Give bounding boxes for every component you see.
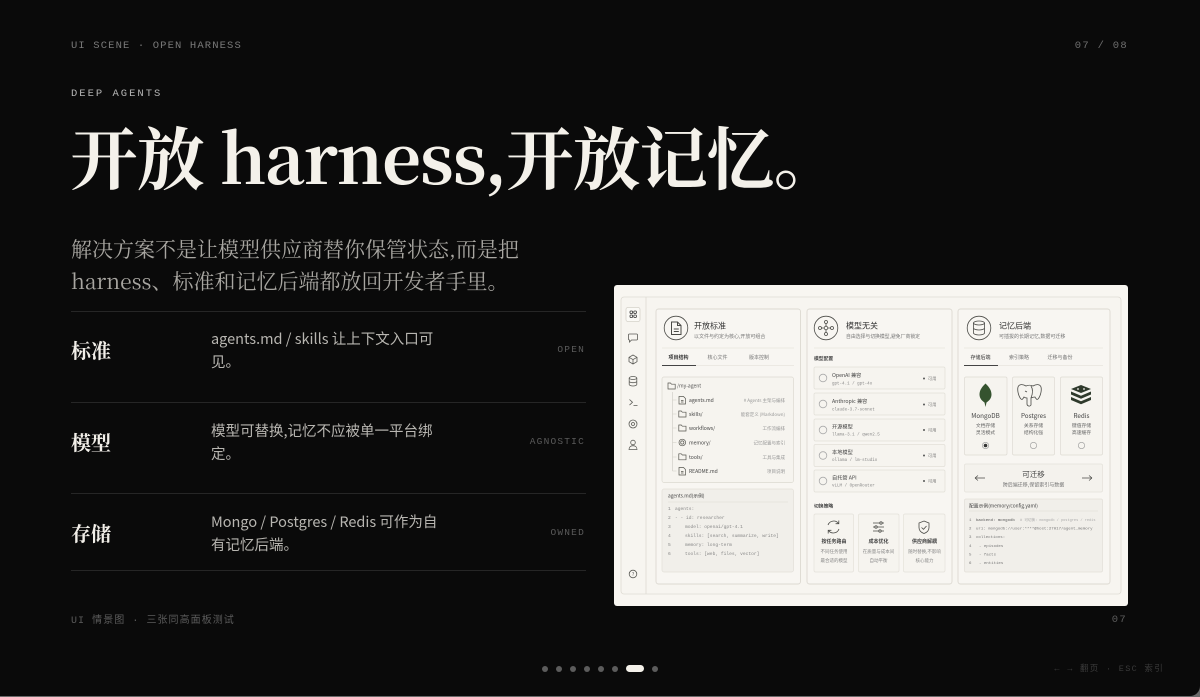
model list: ollama / lm-studio [832,458,878,463]
backend cards: 结构化强 [1024,429,1043,436]
tabs: 版本控制 [749,354,769,361]
row label: 标准 [71,335,111,364]
strategy cards: 核心能力 [916,557,934,564]
code block: agents.md: agents: [675,506,694,512]
backend cards [964,377,1102,455]
row: 存储 [71,493,586,571]
footer: page number: 07 [1112,614,1127,626]
migration card: 跨后端迁移,保留索引与数据 [1003,482,1064,488]
backend cards: Redis [1073,411,1090,420]
tabs: 核心文件 [707,354,728,361]
model list: vLLM / OpenRouter [832,484,875,488]
row tag: OPEN [557,344,585,355]
panel: 模型无关 [807,309,952,584]
strategy cards: 成本优化 [868,538,889,545]
config code block: uri: mongodb://user:****@host:27017/agent_memory [976,526,1093,532]
code block: agents.md: 6 [668,551,671,557]
file tree: 工具与集成 [762,454,785,461]
strategy cards: 在质量与成本间 [863,548,895,555]
file tree: 记忆配置与索引 [754,439,785,446]
code block: agents.md: model: openai/gpt-4.1 [685,524,743,530]
strategy cards: 自动平衡 [870,557,888,564]
model list: llama-3.1 / qwen2.5 [832,432,880,438]
file tree: 项目说明 [767,468,785,475]
file tree: README.md [689,468,718,475]
tabs: 存储后端 [970,354,991,361]
code block: agents.md: skills: [search, summarize, write] [685,533,779,539]
code block: agents.md: - - id: researcher [675,515,725,521]
code block: agents.md [662,489,794,572]
config code block: - facts [979,552,997,558]
config code block: 4 [969,545,972,549]
code block: agents.md: 5 [668,542,671,548]
strategy cards [814,514,945,572]
header: page counter: 07 / 08 [1075,40,1128,52]
code block: agents.md: 3 [668,524,671,530]
subtitle: 解决方案不是让模型供应商替你保管状态,而是把 [71,234,519,264]
tabs: 项目结构 [668,354,689,361]
row body: Mongo / Postgres / Redis 可作为自有记忆后端。 [211,511,437,555]
tabs [970,354,1073,361]
file tree: 能套定义 (Markdown) [741,411,785,418]
model list: 可用 [928,402,936,408]
model list: 可用 [928,376,936,382]
row: 标准 [71,311,586,372]
row tag: OWNED [550,527,585,538]
subtitle [71,234,519,296]
config code block: # 可切换: mongodb / postgres / redis [1020,517,1095,523]
model list [814,367,945,492]
config code block: 配置示例(memory/config.yaml) [969,502,1038,510]
config code block: 5 [969,554,972,558]
config code block: backend: mongodb [976,518,1015,523]
file tree: skills/ [689,411,703,418]
panel subtitle: 自由选择与切换模型,避免厂商锁定 [846,333,920,340]
icon: hub [814,316,838,340]
help glyph: ? [632,571,635,578]
tabs: 迁移与备份 [1047,354,1073,361]
panel subtitle: 可插拔的长期记忆,数据可迁移 [999,333,1065,340]
subtitle: harness、标准和记忆后端都放回开发者手里。 [71,266,508,296]
model list: 可用 [928,453,936,459]
strategy cards: 最合适的模型 [820,557,848,564]
migration card: 可迁移 [1022,469,1045,480]
config code block: 3 [969,536,972,540]
config code block [964,499,1102,572]
code block: agents.md: 1 [668,506,671,512]
migration card [964,464,1102,492]
strategy cards: 不同任务使用 [820,548,848,555]
row: 模型 [71,402,586,464]
icon: database [967,316,991,340]
panel heading: 记忆后端 [999,320,1031,332]
row body: 模型可替换,记忆不应被单一平台绑定。 [211,420,433,464]
arrows [975,476,1092,480]
code block: agents.md: 4 [668,533,671,539]
keyboard hint: ← → 翻页 · ESC 索引 [1054,664,1164,674]
backend cards: 关系存储 [1024,422,1043,429]
file tree: # Agents 主架与编排 [744,397,785,404]
tabs: 索引策略 [1009,354,1029,361]
config code block: 1 [969,519,972,523]
row body: agents.md / skills 让上下文入口可见。 [211,328,433,372]
model list: 可用 [928,478,936,484]
section heading: 模型配置 [814,355,833,362]
panel subtitle: 以文件与约定为核心,开放可组合 [694,333,765,340]
backend cards: MongoDB [971,411,1000,420]
row label: 存储 [71,518,111,547]
tabs [668,354,769,361]
UI screenshot panel [614,285,1128,606]
panel heading: 模型无关 [846,320,878,332]
strategy cards: 随时替换,不影响 [908,548,941,555]
model list: Anthropic 兼容 [832,397,867,405]
file tree: workflows/ [689,425,715,432]
model list: OpenAI 兼容 [832,371,861,379]
backend cards: 文档存储 [976,422,995,429]
sidebar icons [626,308,640,578]
config code block: - episodes [979,544,1004,549]
icon: Redis stack [1071,385,1091,404]
model list: 可用 [928,428,936,434]
code block: agents.md: 2 [668,515,671,521]
backend cards: 键值存储 [1072,422,1091,429]
code block: agents.md: memory: long-term [685,542,732,548]
icon: MongoDB leaf [980,384,992,407]
file tree [662,377,794,482]
file tree: memory/ [689,440,711,446]
file tree: agents.md [689,397,714,404]
eyebrow: DEEP AGENTS [71,88,162,100]
file tree: tools/ [689,454,703,461]
code block: agents.md: tools: [web, files, vector] [685,551,759,557]
backend cards: 高速缓存 [1072,429,1091,436]
panel: 记忆后端 [958,309,1110,584]
config code block: collections: [976,535,1005,540]
strategy cards: 按任务路由 [821,538,847,545]
title: 开放 harness,开放记忆。 [70,107,840,204]
strategy cards: 供应商解耦 [912,538,937,545]
model list: 自托管 API [832,474,857,482]
config code block: 6 [969,562,972,566]
model list: claude-3.7-sonnet [832,408,875,412]
model list: gpt-4.1 / gpt-4o [832,382,873,386]
model list: 开源模型 [832,422,853,430]
icon: document [664,316,688,340]
config code block: - entities [979,561,1004,566]
backend cards: Postgres [1021,411,1046,420]
panel heading: 开放标准 [694,320,726,332]
row label: 模型 [71,427,111,456]
footer: caption: UI 情景图 · 三张同高面板测试 [71,616,235,627]
config code block: 2 [969,528,972,532]
file tree: /my-agent [677,382,701,390]
section heading: 切换策略 [814,502,833,510]
backend cards: 灵活模式 [976,429,995,436]
row tag: AGNOSTIC [530,436,585,447]
panel: 开放标准 [656,309,800,584]
header: scene label: UI SCENE · OPEN HARNESS [71,40,242,52]
pagination dots [542,665,658,672]
file tree: 工作流编排 [762,425,785,432]
icon: Postgres elephant [1018,385,1041,406]
model list: 本地模型 [832,448,853,456]
code block: agents.md: agents.md(示例) [668,492,705,500]
